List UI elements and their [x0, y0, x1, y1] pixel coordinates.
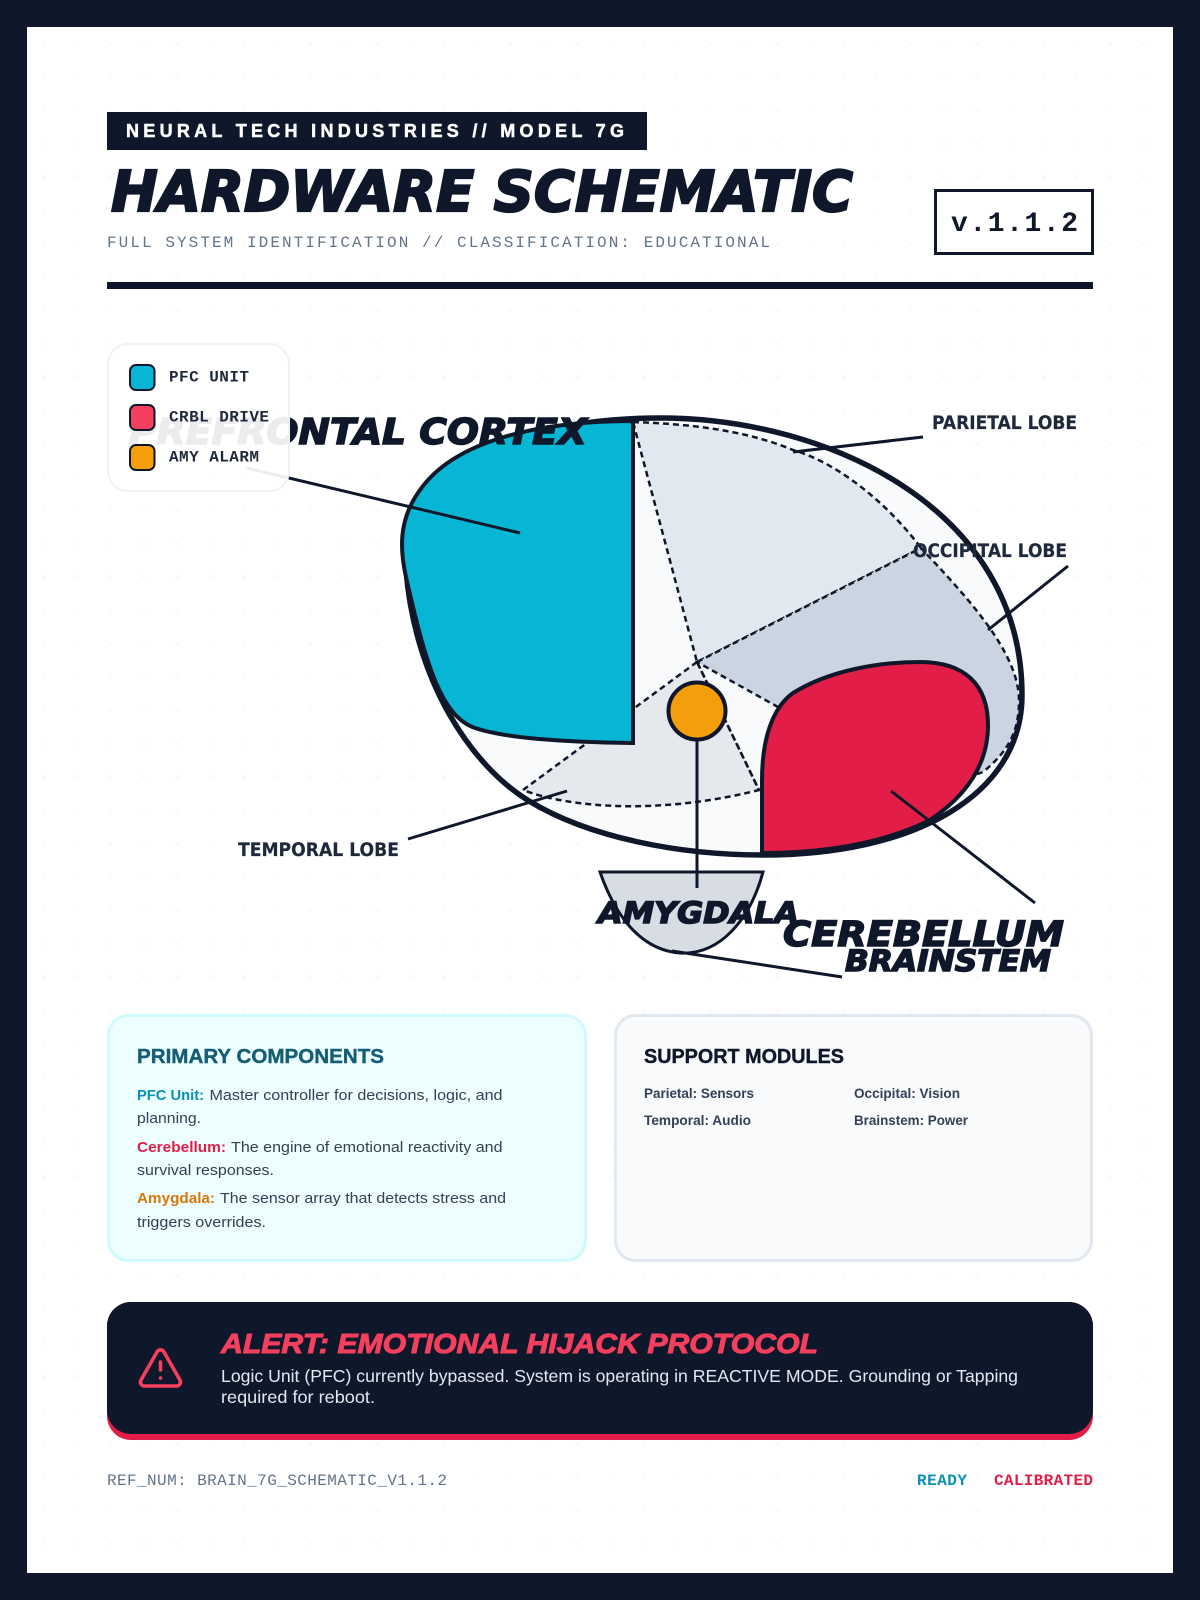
legend item: PFC unit — [130, 365, 249, 390]
region: prefrontal cortex — [402, 421, 633, 743]
region: amygdala node — [668, 682, 726, 740]
text: cerebellum description: survival responses. — [137, 1162, 274, 1179]
legend item: CRBL drive: CRBL DRIVE — [169, 408, 269, 426]
header divider — [107, 282, 1093, 289]
leader: cerebellum — [891, 791, 1035, 903]
text: cerebellum description: The engine of emotional reactivity and — [231, 1139, 502, 1156]
region: occipital lobe — [697, 548, 1019, 800]
legend — [108, 344, 289, 491]
module grid: Brainstem: Power — [854, 1112, 969, 1128]
brain outline — [406, 418, 1022, 855]
footer reference number: REF_NUM: BRAIN_7G_SCHEMATIC_V1.1.2 — [107, 1472, 447, 1490]
leader: parietal — [793, 437, 923, 452]
version badge — [936, 190, 1092, 254]
leader: temporal — [408, 791, 567, 839]
alert body — [221, 1366, 1018, 1407]
leader: occipital — [988, 566, 1068, 630]
module grid: Parietal: Sensors — [644, 1085, 754, 1101]
legend item: AMY alarm: AMY ALARM — [169, 448, 259, 466]
label: amygdala: AMYGDALA — [596, 896, 799, 930]
text: cerebellum description — [137, 1139, 502, 1179]
text: PFC unit description: PFC Unit: — [137, 1087, 204, 1104]
header tag — [107, 112, 647, 150]
leader: brainstem — [672, 951, 842, 977]
dashed link to cerebellum — [697, 662, 759, 790]
brain diagram — [129, 412, 1077, 978]
module grid — [644, 1085, 969, 1128]
leader: prefrontal — [247, 468, 520, 533]
label: parietal lobe: PARIETAL LOBE — [932, 413, 1077, 434]
alert body: required for reboot. — [221, 1387, 375, 1407]
header tag: NEURAL TECH INDUSTRIES // MODEL 7G — [126, 121, 624, 141]
icon: warning triangle — [140, 1350, 180, 1386]
text: amygdala description: Amygdala: — [137, 1190, 215, 1207]
region: cerebellum — [762, 662, 988, 853]
label: occipital lobe: OCCIPITAL LOBE — [913, 541, 1067, 562]
text: PFC unit description: Master controller for decisions, logic, and — [210, 1087, 502, 1104]
module grid: Temporal: Audio — [644, 1112, 751, 1128]
region: parietal lobe — [633, 422, 921, 662]
title: HARDWARE SCHEMATIC — [111, 160, 853, 225]
alert body: Logic Unit (PFC) currently bypassed. System is operating in REACTIVE MODE. Grounding or Tapping — [221, 1366, 1018, 1386]
legend item: CRBL drive — [130, 405, 269, 430]
label: temporal lobe: TEMPORAL LOBE — [238, 840, 399, 861]
text: amygdala description: The sensor array that detects stress and — [220, 1190, 506, 1207]
text: amygdala description — [137, 1190, 506, 1231]
region: brainstem — [600, 872, 763, 953]
text: PFC unit description: planning. — [137, 1110, 201, 1127]
text: PFC unit description — [137, 1087, 502, 1127]
panel: primary components — [108, 1016, 586, 1260]
label: cerebellum: CEREBELLUM — [783, 915, 1064, 955]
module grid: Occipital: Vision — [854, 1085, 960, 1101]
legend item: PFC unit: PFC UNIT — [169, 368, 249, 386]
heading: support modules: SUPPORT MODULES — [644, 1046, 844, 1068]
alert heading: ALERT: EMOTIONAL HIJACK PROTOCOL — [220, 1328, 818, 1359]
subtitle: FULL SYSTEM IDENTIFICATION // CLASSIFICATION: EDUCATIONAL — [107, 234, 770, 252]
region: temporal lobe — [523, 662, 759, 806]
text: amygdala description: triggers overrides. — [137, 1214, 266, 1231]
heading: primary components: PRIMARY COMPONENTS — [137, 1046, 384, 1068]
footer status: ready: READY — [917, 1472, 967, 1490]
amygdala stem line — [696, 735, 698, 888]
version badge: v.1.1.2 — [951, 209, 1078, 240]
legend item: AMY alarm — [130, 445, 259, 470]
label: brainstem: BRAINSTEM — [845, 944, 1051, 978]
panel: alert banner — [107, 1302, 1093, 1440]
text: cerebellum description: Cerebellum: — [137, 1139, 226, 1156]
label: prefrontal cortex: PREFRONTAL CORTEX — [129, 412, 589, 453]
panel: support modules — [616, 1016, 1092, 1260]
footer status: calibrated: CALIBRATED — [994, 1472, 1093, 1490]
